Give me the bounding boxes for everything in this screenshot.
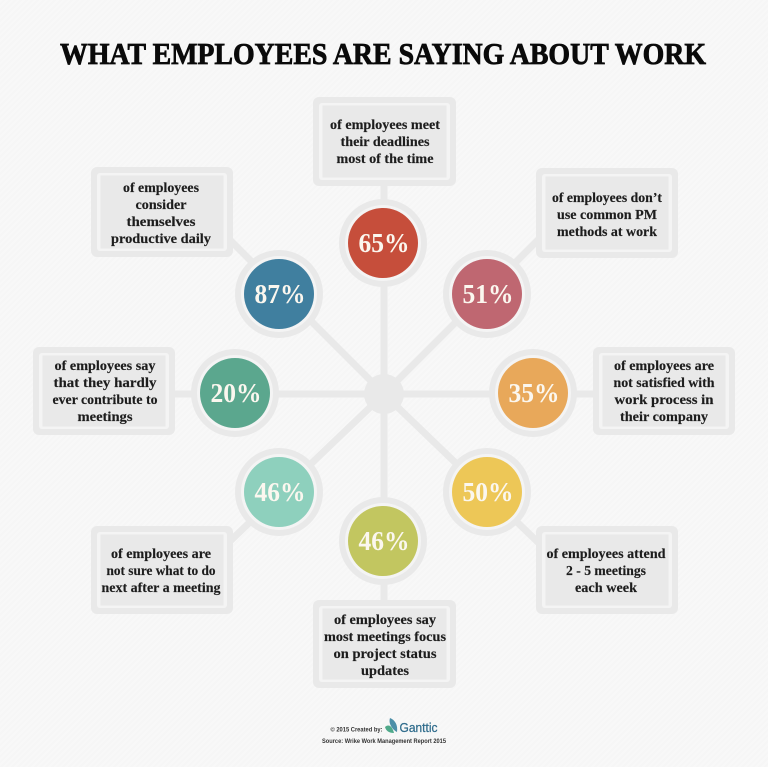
panel: 35% work process: not satisfied with [614,375,715,390]
panel: 50% meetings [536,526,678,614]
panel: 20% contribute [33,347,175,435]
stat: 87%: 87% [254,279,306,309]
panel: 46% status updates: updates [361,663,409,678]
footer credit: © 2015 Created by: [330,726,382,734]
stat: 87% [235,250,323,338]
footer credit: Source: Wrike Work Management Report 2015 [322,738,446,745]
panel: 46% status updates: on project status [334,646,436,661]
stat: 35% [489,349,577,437]
stat: 46% left [235,448,323,536]
panel: 65% deadlines: most of the time [336,151,434,166]
stat: 35%: 35% [508,378,560,408]
panel: 46% what next [91,526,233,614]
panel: 46% status updates: most meetings focus [324,629,446,644]
stat: 51%: 51% [462,279,514,309]
panel: 50% meetings: of employees attend [546,546,666,561]
panel: 65% deadlines: of employees meet [330,117,441,132]
panel: 87% productive [91,167,233,257]
panel: 20% contribute: ever contribute to [52,392,158,407]
stat: 50%: 50% [462,477,514,507]
panel: 20% contribute: meetings [78,409,132,424]
stat: 20%: 20% [210,378,262,408]
logo wordmark: Ganttic [400,720,438,735]
stat: 51% [443,250,531,338]
stat: 46% bottom: 46% [358,526,410,556]
panel: 46% what next: of employees are [111,546,211,561]
panel: 65% deadlines [313,97,456,186]
panel: 35% work process: their company [620,409,708,424]
panel: 87% productive: consider [136,197,187,212]
panel: 50% meetings: each week [575,580,638,595]
panel: 46% what next: next after a meeting [102,580,221,595]
panel: 35% work process [593,347,735,435]
icon: Ganttic logo leaf [385,718,397,733]
panel: 20% contribute: that they hardly [54,375,157,390]
panel: 35% work process: of employees are [614,358,714,373]
panel: 51% PM methods: methods at work [557,224,658,239]
stat: 20% [191,349,279,437]
panel: 20% contribute: of employees say [54,358,156,373]
stat: 65%: 65% [358,228,410,258]
panel: 51% PM methods: of employees don’t [552,190,663,205]
title: WHAT EMPLOYEES ARE SAYING ABOUT WORK [60,36,706,71]
stat: 46% bottom [339,497,427,585]
panel: 65% deadlines: their deadlines [340,134,430,149]
panel: 87% productive: themselves [126,214,196,229]
panel: 51% PM methods: use common PM [557,207,657,222]
panel: 46% what next: not sure what to do [106,563,216,578]
hub and spokes [175,180,593,600]
panel: 87% productive: of employees [123,180,199,195]
panel: 87% productive: productive daily [111,231,211,246]
panel: 51% PM methods [536,168,678,258]
panel: 50% meetings: 2 - 5 meetings [566,563,646,578]
stat: 65% [339,199,427,287]
footer credit [322,718,446,745]
panel: 46% status updates [313,600,456,688]
stat: 46% left: 46% [254,477,306,507]
panel: 46% status updates: of employees say [334,612,436,627]
stat: 50% [443,448,531,536]
panel: 35% work process: work process in [614,392,714,407]
